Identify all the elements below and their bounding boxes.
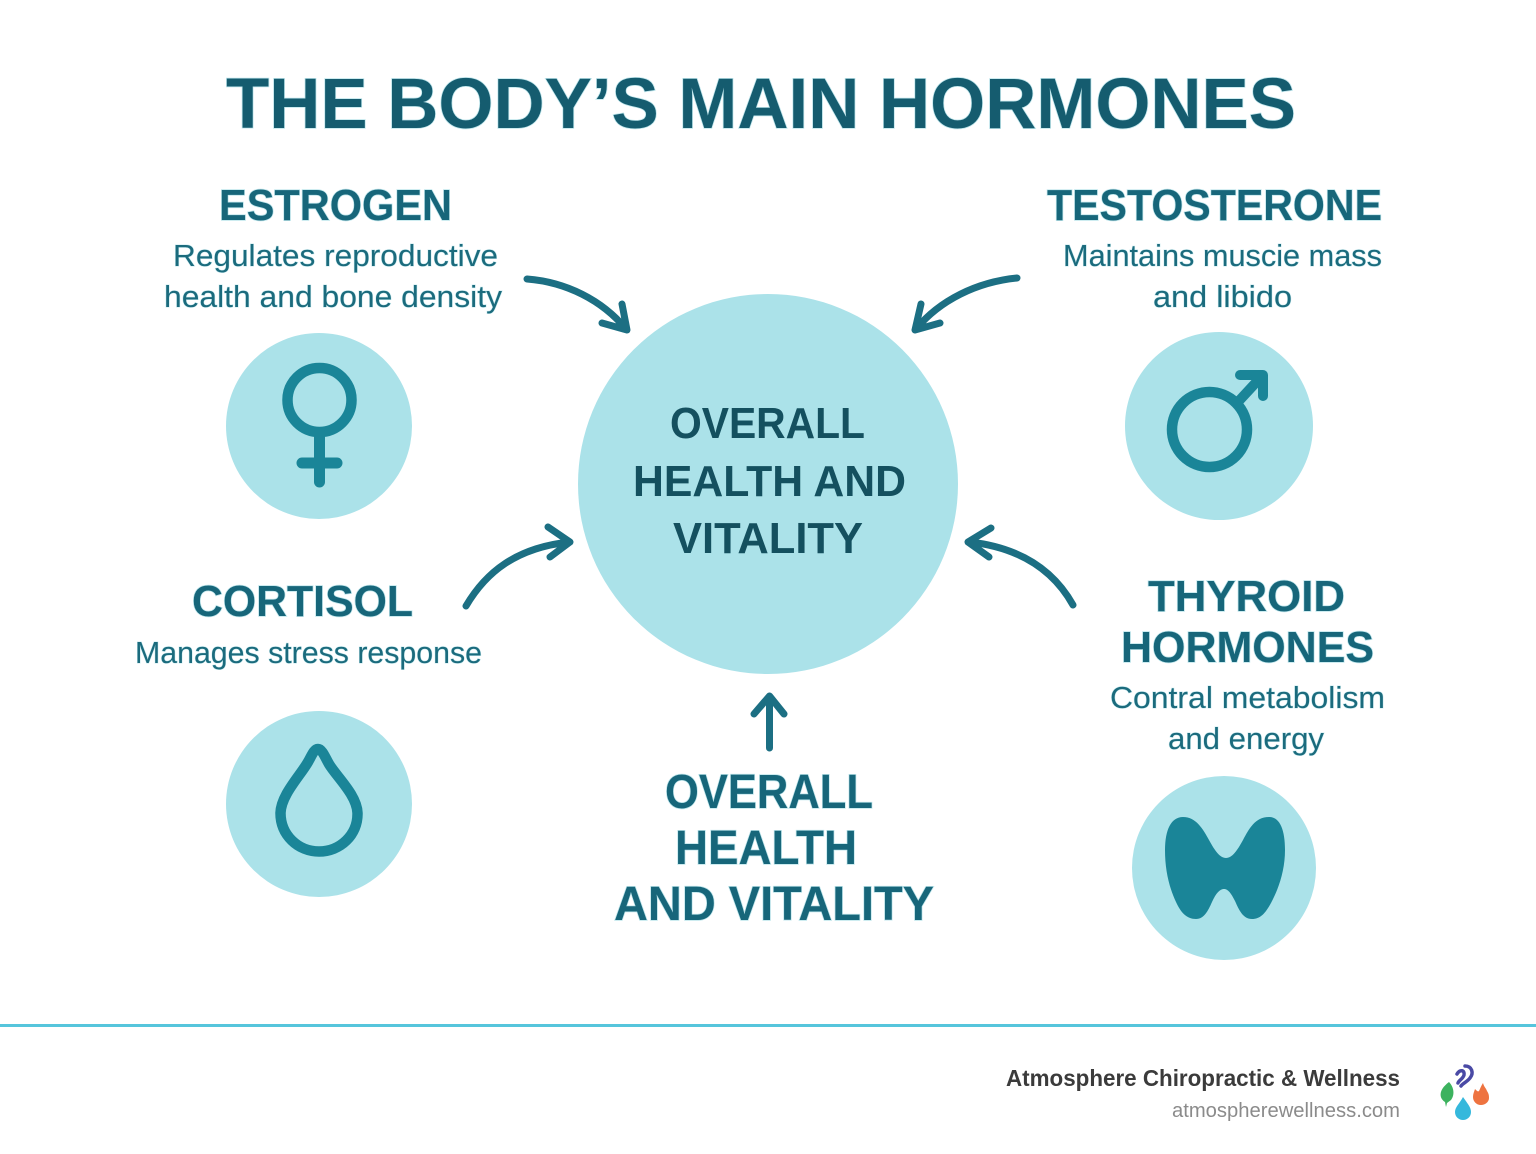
panel: overall health and vitality label: HEALTH	[675, 822, 857, 875]
icon: female symbol	[226, 333, 412, 519]
arrow: thyroid to center	[968, 528, 1073, 605]
icon: droplet	[226, 711, 412, 897]
estrogen heading: ESTROGEN	[219, 181, 452, 230]
testosterone description: and libido	[1153, 279, 1292, 314]
icon: male symbol	[1125, 332, 1313, 520]
arrow: estrogen to center	[527, 279, 627, 330]
panel: cortisol	[135, 577, 482, 897]
footer website: atmospherewellness.com	[1172, 1100, 1400, 1122]
cortisol heading: CORTISOL	[192, 577, 413, 626]
arrow: bottom label to center	[754, 696, 784, 748]
estrogen description	[164, 238, 503, 314]
arrow: testosterone to center	[915, 278, 1017, 330]
testosterone description: Maintains muscie mass	[1063, 238, 1382, 273]
panel: overall health and vitality label: OVERALL	[665, 766, 873, 819]
testosterone heading: TESTOSTERONE	[1047, 181, 1382, 230]
cortisol description: Manages stress response	[135, 635, 482, 670]
central circle: overall health and vitality: HEALTH AND	[633, 457, 906, 506]
arrow: cortisol to center	[466, 527, 570, 606]
estrogen description: health and bone density	[164, 279, 503, 314]
icon: company logo	[1441, 1066, 1489, 1120]
thyroid description	[1110, 680, 1385, 756]
thyroid heading: THYROID	[1148, 572, 1345, 621]
panel: estrogen	[164, 181, 503, 519]
panel: overall health and vitality label: AND VITALITY	[614, 878, 934, 931]
thyroid description: Contral metabolism	[1110, 680, 1385, 715]
icon: thyroid gland	[1132, 776, 1316, 960]
thyroid description: and energy	[1168, 721, 1324, 756]
footer brand name: Atmosphere Chiropractic & Wellness	[1006, 1065, 1400, 1091]
central circle: overall health and vitality	[578, 294, 958, 674]
panel: thyroid hormones	[1110, 572, 1385, 960]
testosterone description	[1063, 238, 1382, 314]
footer rule	[0, 1024, 1536, 1027]
estrogen description: Regulates reproductive	[173, 238, 498, 273]
central circle: overall health and vitality: OVERALL	[670, 399, 865, 448]
title: THE BODY’S MAIN HORMONES	[226, 65, 1296, 144]
panel: testosterone	[1047, 181, 1382, 520]
central circle: overall health and vitality: VITALITY	[673, 514, 863, 563]
panel: overall health and vitality label	[614, 766, 934, 931]
thyroid heading: HORMONES	[1121, 623, 1374, 672]
thyroid heading	[1121, 572, 1374, 672]
